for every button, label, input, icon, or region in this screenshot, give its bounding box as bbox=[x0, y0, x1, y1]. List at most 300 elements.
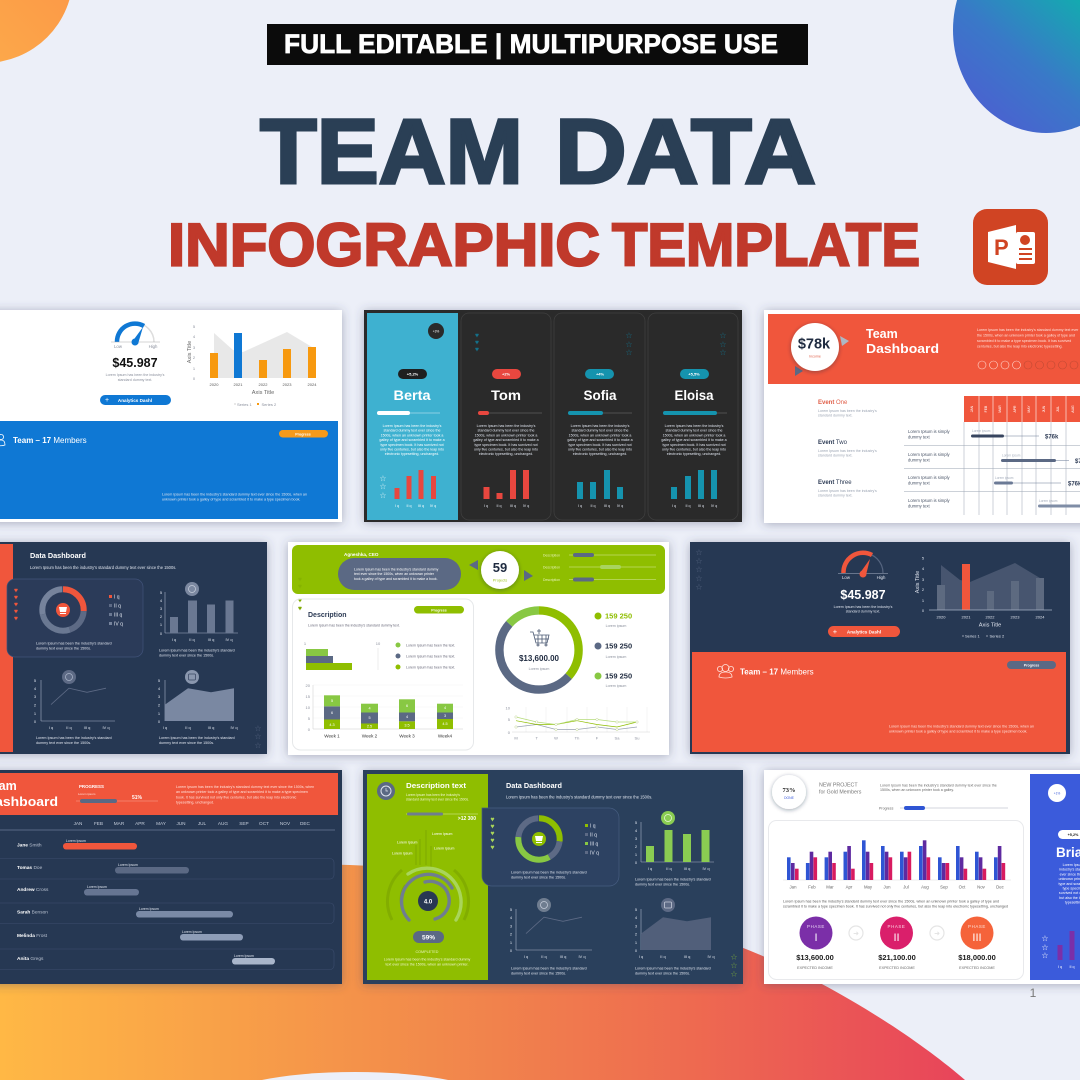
chart: monthly bars: Oct bbox=[959, 884, 966, 890]
subtitle: infographic template: TEMPLATE bbox=[612, 212, 920, 278]
card: Eloisa: II q bbox=[686, 504, 690, 508]
event list bbox=[818, 400, 877, 498]
chart: weekly lines: W bbox=[554, 736, 558, 740]
button: analytics bbox=[828, 626, 900, 637]
phase II: II bbox=[893, 932, 900, 944]
card: Brian: ☆ bbox=[1041, 951, 1049, 960]
chart: line bbox=[34, 670, 115, 745]
phase I: EXPECTED INCOME bbox=[797, 966, 833, 970]
chart: area: III q bbox=[208, 725, 214, 730]
chart: area: 2 bbox=[158, 702, 161, 708]
chart: radial gauge: Lorem Ipsum bbox=[392, 852, 413, 856]
team names: Sarah Benson bbox=[17, 910, 48, 916]
chart: area: 3 bbox=[635, 924, 638, 928]
card: Eloisa: galley of type and scrambled it to make a bbox=[661, 438, 727, 442]
text block: 1500s, when an unknown printer took a galley. bbox=[880, 788, 954, 792]
card: Eloisa: I q bbox=[672, 504, 676, 508]
chart: bar and area: 4 bbox=[193, 334, 196, 339]
event list: Event One bbox=[818, 400, 848, 406]
pill: 59%: 59% bbox=[422, 934, 435, 942]
gauge bbox=[838, 553, 888, 580]
phase II: EXPECTED INCOME bbox=[879, 966, 915, 970]
chart: bars: 0 bbox=[160, 631, 163, 636]
card: description: Lorem Ipsum has been the industry's standard dummy text. bbox=[308, 624, 400, 628]
text block: Lorem Ipsum has been the industry's standard dummy text ever since the 1500s, when an unknown printer took a galley of type and bbox=[783, 900, 999, 904]
event list: standard dummy text. bbox=[818, 454, 853, 458]
chart: bars: II q bbox=[666, 866, 672, 871]
months axis bbox=[74, 821, 311, 826]
panel: data dashboard green sidebar bbox=[363, 770, 743, 984]
card: donut chart: ♥ bbox=[490, 838, 495, 844]
gantt chart: Lorem Ipsum is simply bbox=[908, 498, 951, 503]
arrow: ➜ bbox=[934, 930, 940, 938]
chart: monthly bars: Feb bbox=[808, 884, 816, 890]
event list: Lorem Ipsum has been the industry's bbox=[818, 409, 877, 413]
icon: powerpoint bbox=[973, 209, 1048, 285]
chart: bars: IV q bbox=[702, 866, 710, 871]
chart: area: 5 bbox=[158, 678, 161, 683]
legend: donut values: 159 250 bbox=[605, 642, 632, 650]
chart: radial gauge: Lorem Ipsum bbox=[434, 846, 455, 850]
gantt chart: JUN bbox=[1042, 405, 1046, 412]
chart: bar and area: Series 2 bbox=[262, 402, 277, 407]
phase III: $18,000.00 bbox=[958, 953, 996, 962]
card: Tom: type specimen book. It has survived not bbox=[474, 443, 538, 447]
title: team data: TEAM bbox=[260, 101, 523, 203]
months axis: SEP bbox=[239, 821, 249, 826]
timeline bars: Lorem Ipsum bbox=[66, 839, 86, 843]
chart: stacked bars: 3.5 bbox=[404, 724, 410, 728]
text block: book. It has survived not only five centuries, but also the leap into electronic bbox=[176, 795, 296, 799]
card: Sofia: Lorem Ipsum has been the industry's bbox=[571, 424, 630, 428]
chart: horizontal bars: Lorem Ipsum has been the text. bbox=[406, 654, 455, 658]
chart: line: IV q bbox=[578, 954, 586, 959]
icon: team bbox=[0, 434, 5, 446]
chart: bar and area: 4 bbox=[922, 566, 925, 571]
chart: line: 4 bbox=[34, 686, 37, 691]
chart: radial gauge bbox=[387, 830, 469, 920]
timeline bars: Lorem Ipsum bbox=[118, 863, 138, 867]
chart: radial gauge: Lorem Ipsum bbox=[432, 832, 453, 836]
chart: area: 1 bbox=[158, 711, 161, 716]
chart: bar and area: Axis Title bbox=[252, 390, 274, 396]
chart: line: 0 bbox=[34, 719, 37, 724]
card: Eloisa: IV q bbox=[711, 504, 717, 508]
text block: Lorem Ipsum has been the industry's standard dummy text ever since the 1500s. bbox=[30, 565, 176, 570]
label: completed: COMPLETED bbox=[416, 950, 439, 954]
chart: stacked bars: 5 bbox=[331, 699, 333, 703]
chart: bar and area bbox=[187, 324, 317, 407]
chart: area: Lorem Ipsum has been the industry's standard bbox=[159, 736, 235, 740]
card: Eloisa: Eloisa bbox=[674, 388, 714, 403]
text block: standard dummy text. bbox=[846, 610, 880, 614]
chart: line: 5 bbox=[510, 907, 513, 912]
chart: monthly bars bbox=[783, 840, 1011, 890]
chart: monthly bars: Jun bbox=[884, 884, 891, 890]
panel: team dashboard gantt bbox=[764, 310, 1080, 523]
heading: team dashboard: Team bbox=[866, 327, 898, 341]
chart: area: 5 bbox=[635, 907, 638, 912]
stars: ☆ bbox=[695, 548, 703, 557]
card: donut chart: ♥ bbox=[14, 594, 18, 602]
legend: donut values: Lorem ipsum bbox=[606, 624, 626, 628]
chart: bars: I q bbox=[172, 637, 176, 642]
chart: bars: 3 bbox=[635, 836, 638, 841]
panel: team timeline bbox=[0, 770, 342, 984]
gauge: Low bbox=[842, 575, 851, 580]
event list: Lorem Ipsum has been the industry's bbox=[818, 449, 877, 453]
chart: bars bbox=[635, 811, 714, 886]
arrow bbox=[849, 926, 863, 940]
chart: big donut bbox=[499, 610, 579, 690]
chart: area: II q bbox=[185, 725, 191, 730]
card: Sofia: Sofia bbox=[584, 388, 617, 403]
card: Eloisa: standard dummy text ever since the bbox=[666, 429, 722, 433]
chart: horizontal bars bbox=[304, 641, 455, 670]
chart: line: dummy text ever since the 1500s. bbox=[36, 741, 91, 745]
card: Eloisa: ☆ bbox=[719, 331, 727, 340]
chart: area: dummy text ever since the 1500s. bbox=[159, 741, 214, 745]
phase I: $13,600.00 bbox=[796, 953, 834, 962]
chart: horizontal bars: 10 bbox=[376, 641, 381, 646]
card: donut chart: ♥ bbox=[14, 608, 18, 616]
chart: stacked bars bbox=[306, 683, 463, 738]
card: Berta: Berta bbox=[394, 388, 431, 403]
banner: full editable bbox=[267, 24, 808, 65]
card: Eloisa: Lorem Ipsum has been the industry's bbox=[665, 424, 724, 428]
chart: bar and area: 2021 bbox=[234, 382, 243, 387]
card: Tom: galley of type and scrambled it to make a bbox=[473, 438, 539, 442]
months axis: MAY bbox=[156, 821, 167, 826]
phase I: I bbox=[814, 932, 818, 944]
chart: line: II q bbox=[66, 725, 72, 730]
card: Berta bbox=[367, 313, 458, 520]
arrow: ➜ bbox=[853, 930, 859, 938]
chart: area: I q bbox=[639, 954, 643, 959]
chart: bar and area: 5 bbox=[922, 556, 925, 560]
stars: ☆ bbox=[254, 724, 262, 733]
stars: ☆ bbox=[730, 952, 738, 962]
card: donut chart bbox=[7, 579, 143, 657]
card: Tom: electronic typesetting, unchanged. bbox=[479, 452, 533, 456]
chart: bars: dummy text ever since the 1500s. bbox=[159, 654, 214, 658]
card: Tom: III q bbox=[510, 504, 516, 508]
done badge bbox=[772, 775, 806, 809]
text block: Lorem Ipsum has been the industry's standard dummy text ever since the bbox=[880, 784, 997, 788]
subtitle: infographic template: INFOGRAPHIC bbox=[168, 212, 600, 278]
chart: area: 4 bbox=[635, 915, 638, 920]
legend: donut values bbox=[594, 612, 632, 688]
stars bbox=[254, 724, 262, 750]
card: donut chart: ♥ bbox=[490, 816, 495, 824]
chart: line: Lorem Ipsum has been the industry's standard bbox=[511, 966, 587, 970]
card: donut chart: IV q bbox=[114, 622, 123, 628]
chart: stacked bars: 10 bbox=[306, 705, 311, 710]
chart: area: III q bbox=[684, 954, 690, 959]
legend: donut values: 159 250 bbox=[605, 612, 632, 620]
card: Berta: I q bbox=[395, 504, 399, 508]
chart: line: Lorem Ipsum has been the industry's standard bbox=[36, 736, 112, 740]
card: Sofia: 1500s, when an unknown printer took a bbox=[569, 433, 631, 437]
gantt chart: Lorem Ipsum is simply bbox=[908, 452, 951, 457]
income badge bbox=[791, 323, 849, 376]
gantt chart: dummy text bbox=[908, 458, 930, 462]
chart: stacked bars: 4.5 bbox=[442, 722, 448, 726]
description sliders: Description bbox=[543, 554, 560, 558]
card: Sofia: ☆ bbox=[625, 340, 633, 349]
chart: bar and area: 2020 bbox=[937, 614, 946, 620]
chart: bar and area: 2022 bbox=[259, 382, 268, 387]
card: Berta: electronic typesetting, unchanged. bbox=[385, 452, 439, 456]
card: Tom: Lorem Ipsum has been the industry's bbox=[477, 424, 536, 428]
card: Berta: Lorem Ipsum has been the industry's bbox=[383, 424, 442, 428]
speech bubble bbox=[338, 558, 461, 590]
text block: scrambled it to make a type specimen book. It has survived not only five centuries, but also the leap into electronic typesetting, unchanged bbox=[783, 904, 1008, 908]
band: blue team bbox=[0, 421, 338, 519]
team names: Andrew Cross bbox=[17, 887, 49, 893]
card: Tom: I q bbox=[484, 504, 488, 508]
chart: horizontal bars: 1 bbox=[304, 641, 307, 646]
chart: bar and area: 5 bbox=[193, 324, 196, 329]
card: donut chart: II q bbox=[114, 604, 121, 610]
chart: bars: 2 bbox=[635, 844, 638, 849]
chart: area bbox=[158, 670, 238, 745]
chart: weekly lines: Th bbox=[575, 736, 579, 740]
decorative white ellipse bottom bbox=[222, 1072, 488, 1080]
chart: bars: Lorem Ipsum has been the industry's standard bbox=[635, 878, 711, 882]
card: Sofia: III q bbox=[604, 504, 610, 508]
chart: area bbox=[635, 898, 715, 976]
chart: stacked bars: Week 1 bbox=[324, 734, 340, 738]
rating circles bbox=[978, 361, 1078, 369]
card: Berta: IV q bbox=[430, 504, 436, 508]
card: Sofia: standard dummy text ever since the bbox=[572, 429, 628, 433]
months axis: JUN bbox=[176, 821, 186, 826]
chart: area: 2 bbox=[635, 932, 638, 936]
phase II bbox=[878, 916, 916, 970]
gantt chart: JUL bbox=[1056, 406, 1060, 412]
heading: description text: Description text bbox=[406, 783, 467, 790]
sidebar bbox=[367, 774, 488, 980]
chart: stacked bars: 0 bbox=[308, 727, 311, 732]
chart: weekly lines: Sa bbox=[615, 736, 620, 740]
card: Berta: ☆ bbox=[379, 482, 387, 491]
chart: stacked bars: 4 bbox=[444, 706, 446, 710]
team names: Jane Smith bbox=[17, 842, 42, 848]
chart: monthly bars: Jan bbox=[790, 884, 797, 890]
card: Tom bbox=[461, 313, 551, 520]
panel: dark team members bbox=[364, 310, 742, 522]
stars: ☆ bbox=[695, 574, 703, 583]
text block: standard dummy text ever since the 1500s. bbox=[406, 798, 469, 802]
chart: radial gauge: Lorem Ipsum bbox=[397, 840, 418, 844]
gantt chart: Lorem Ipsum is simply bbox=[908, 429, 951, 434]
chart: weekly lines: T bbox=[535, 736, 538, 740]
panel: navy analytics slide bbox=[690, 542, 1070, 754]
text block: scrambled it to make a type specimen book. It has survived bbox=[977, 339, 1071, 343]
progress: PROGRESS bbox=[79, 784, 104, 789]
card: Tom: Tom bbox=[491, 388, 521, 403]
chart: line: 4 bbox=[510, 915, 513, 920]
icon: powerpoint: P bbox=[994, 235, 1009, 260]
card: Tom: ♥ bbox=[475, 346, 479, 354]
heading: new project: NEW PROJECT bbox=[819, 782, 858, 788]
chart: stacked bars: Week4 bbox=[438, 734, 453, 738]
gantt chart: MAR bbox=[998, 405, 1002, 413]
progress: Progress bbox=[879, 806, 894, 810]
row outlines bbox=[0, 858, 334, 970]
card: Brian: ☆ bbox=[1041, 943, 1049, 952]
phase III: EXPECTED INCOME bbox=[959, 966, 995, 970]
card: Eloisa: +5,5% bbox=[688, 372, 700, 376]
phase II: $21,100.00 bbox=[878, 953, 916, 962]
chart: bar and area: 0 bbox=[922, 608, 925, 613]
card: Brian bbox=[1030, 774, 1080, 980]
chart: line bbox=[510, 898, 592, 976]
gantt chart bbox=[904, 396, 1080, 515]
card: Tom: 1500s, when an unknown printer took a bbox=[475, 433, 537, 437]
gantt chart: Lorem Ipsum is simply bbox=[908, 475, 951, 480]
chart: bar and area: Axis Title bbox=[915, 571, 921, 593]
stars: ☆ bbox=[730, 970, 738, 978]
chart: line: 3 bbox=[510, 924, 513, 928]
card: Eloisa: 1500s, when an unknown printer took a bbox=[663, 433, 725, 437]
team names: Anita Gregs bbox=[17, 956, 44, 962]
progress bbox=[76, 784, 158, 803]
panel: new project bbox=[764, 770, 1080, 984]
card: Berta: ☆ bbox=[379, 491, 387, 500]
chart: stacked bars: 4.3 bbox=[329, 723, 335, 727]
chart: weekly lines: 10 bbox=[506, 706, 511, 710]
heading: Data Dashboard bbox=[30, 551, 86, 560]
stars bbox=[730, 952, 738, 978]
chart: stacked bars: 15 bbox=[306, 694, 311, 699]
chart: line: I q bbox=[49, 725, 53, 730]
description sliders bbox=[543, 553, 656, 582]
decorative orange blob top left bbox=[0, 0, 73, 63]
card: donut chart: III q bbox=[114, 612, 123, 618]
timeline bars: Lorem Ipsum bbox=[139, 907, 159, 911]
card: Berta: ☆ bbox=[379, 474, 387, 483]
progress bbox=[879, 806, 1008, 810]
card: Berta: +5,2% bbox=[407, 372, 419, 376]
chart: bars: 3 bbox=[160, 606, 163, 611]
chart: area: 4 bbox=[158, 686, 161, 691]
gantt chart: Lorem ipsum bbox=[1002, 454, 1021, 458]
chart: bars: 4 bbox=[635, 828, 638, 833]
months axis: AUG bbox=[218, 821, 228, 826]
card: donut chart: ♥ bbox=[14, 588, 18, 594]
card: Brian: ☆ bbox=[1041, 934, 1049, 943]
stars: ☆ bbox=[254, 741, 262, 750]
chart: line: III q bbox=[84, 725, 90, 730]
chart: bar and area: Series 1 bbox=[237, 402, 252, 407]
chart: line: 0 bbox=[510, 948, 513, 953]
card: Sofia: type specimen book. It has survived not bbox=[568, 443, 632, 447]
gantt chart: dummy text bbox=[908, 504, 930, 508]
card: donut chart: dummy text ever since the 1500s. bbox=[511, 876, 566, 880]
chart: stacked bars: 4 bbox=[406, 715, 408, 719]
chart: stacked bars: 2.5 bbox=[367, 724, 372, 728]
speech bubble: Lorem Ipsum has been the industry's standard dummy bbox=[354, 568, 439, 572]
chart: bars: 1 bbox=[635, 852, 638, 857]
decorative blue blob top right bbox=[953, 0, 1080, 133]
card: Sofia bbox=[554, 313, 645, 520]
chart: bars: 0 bbox=[635, 860, 638, 865]
card: donut chart bbox=[482, 808, 619, 886]
income badge: $78k bbox=[798, 336, 831, 352]
card: donut chart: ♥ bbox=[490, 824, 495, 830]
card: Sofia: electronic typesetting, unchanged. bbox=[573, 452, 627, 456]
card: Tom: ♥ bbox=[475, 340, 479, 346]
card: Tom: IV q bbox=[523, 504, 529, 508]
card: Eloisa: III q bbox=[698, 504, 704, 508]
chart: stacked bars: 6 bbox=[331, 711, 333, 715]
card: donut chart: ♥ bbox=[14, 602, 18, 608]
chart: stacked bars: Week 2 bbox=[362, 734, 378, 738]
card: Eloisa: ☆ bbox=[719, 340, 727, 349]
months axis: OCT bbox=[259, 821, 269, 826]
chart: bars: 2 bbox=[160, 614, 163, 619]
card: donut chart: II q bbox=[590, 832, 597, 838]
band: orange team bbox=[692, 652, 1066, 752]
chart: bar and area: 0 bbox=[193, 376, 196, 381]
phase I bbox=[796, 916, 834, 970]
gauge: High bbox=[877, 575, 886, 580]
chart: monthly bars: Dec bbox=[996, 884, 1005, 890]
card: Sofia: II q bbox=[590, 504, 596, 508]
chart: stacked bars: 6 bbox=[406, 704, 408, 708]
months axis: JAN bbox=[74, 821, 82, 826]
chart: monthly bars: Apr bbox=[846, 884, 853, 890]
chart: area: dummy text ever since the 1500s. bbox=[635, 972, 690, 976]
team names: Melinda Frost bbox=[17, 933, 48, 939]
chart: bars: 1 bbox=[160, 622, 163, 627]
chart: bar and area: Axis Title bbox=[187, 341, 193, 363]
phase III bbox=[958, 916, 996, 970]
text block: Lorem Ipsum has been the industry's bbox=[106, 373, 165, 377]
chart: bar and area: 3 bbox=[193, 345, 196, 350]
card: donut chart: ♥ bbox=[14, 616, 18, 622]
pill: progress: Progress bbox=[1024, 664, 1039, 668]
description sliders: Description bbox=[543, 566, 560, 570]
card: donut chart: ♥ bbox=[490, 844, 495, 852]
pill: 59% bbox=[413, 931, 444, 943]
months axis: JUL bbox=[198, 821, 207, 826]
icon: team bbox=[717, 664, 734, 678]
text block: unknown printer took a galley of type and scrambled it to make a type specimen book. bbox=[889, 730, 1027, 734]
chart: bar and area: 2 bbox=[193, 355, 196, 360]
card: Sofia: only five centuries, but also the leap into bbox=[568, 448, 632, 452]
chart: weekly lines: F bbox=[596, 736, 599, 740]
chart: stacked bars: 4 bbox=[368, 706, 371, 710]
value: $45.987: $45.987 bbox=[840, 588, 886, 602]
banner: full editable: FULL EDITABLE | MULTIPURPOSE USE bbox=[284, 29, 778, 59]
text block: Lorem Ipsum has been the industry's bbox=[834, 605, 893, 609]
card: Eloisa: electronic typesetting, unchanged. bbox=[667, 452, 721, 456]
card: Berta: III q bbox=[418, 504, 424, 508]
done badge: DONE bbox=[784, 796, 795, 800]
event list: standard dummy text. bbox=[818, 414, 853, 418]
chart: bar and area: 3 bbox=[922, 577, 925, 582]
card: Tom: ♥ bbox=[475, 332, 479, 340]
chart: weekly lines: M bbox=[514, 736, 518, 740]
progress bbox=[406, 812, 478, 822]
card: Eloisa bbox=[648, 313, 738, 520]
gantt chart: dummy text bbox=[908, 480, 930, 486]
pill: progress bbox=[279, 430, 328, 438]
heading: team dashboard: Dashboard bbox=[866, 342, 939, 356]
